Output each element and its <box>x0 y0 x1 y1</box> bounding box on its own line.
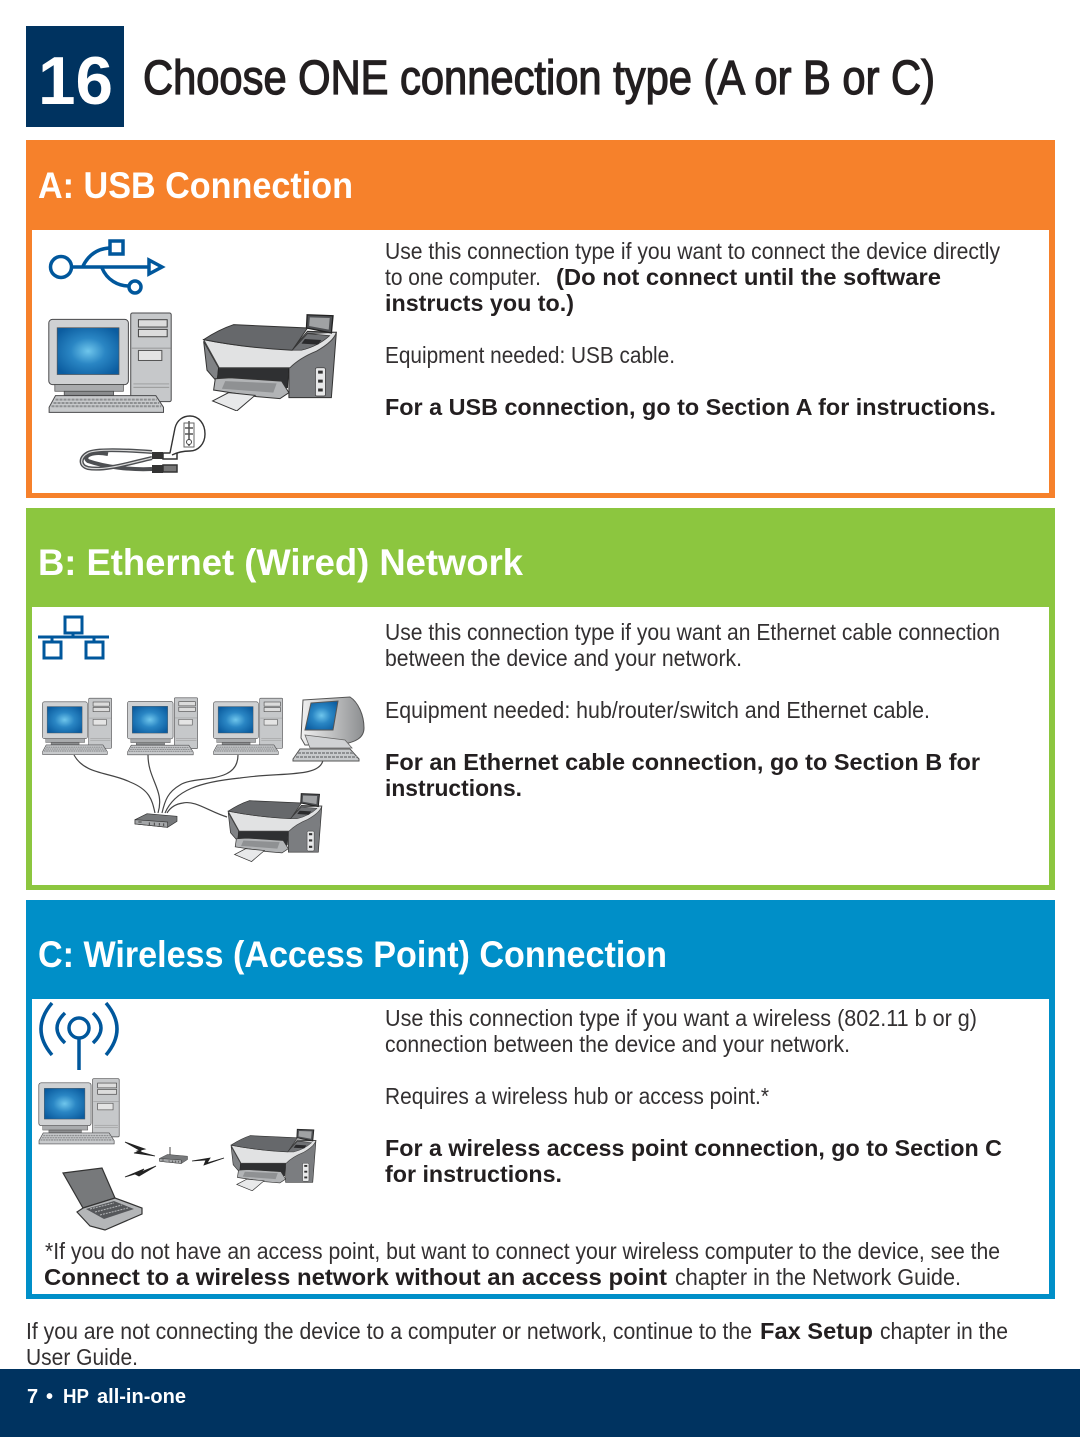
text: wireless description: For a wireless access point connection, go to Section C <box>385 1135 1002 1161</box>
text: access point footnote: *If you do not have an access point, but want to connect your wireless computer to the device, see the <box>45 1238 1000 1264</box>
illustration: printer <box>231 1129 316 1191</box>
text: closing note: User Guide. <box>26 1344 138 1370</box>
illustration: computer <box>39 1079 119 1144</box>
illustration: printer <box>204 315 336 411</box>
heading: A: A: USB Connection <box>38 165 353 206</box>
text: USB description <box>385 238 1000 420</box>
icon: wireless antenna <box>41 1003 117 1070</box>
illustration: cables <box>74 755 323 817</box>
icon: USB symbol <box>50 241 162 293</box>
text: closing note: If you are not connecting the device to a computer or network, continue to the <box>26 1318 752 1344</box>
text: Ethernet description <box>385 619 1000 801</box>
panel: C wireless connection <box>26 900 1055 1299</box>
illustration: computer 2 <box>127 698 198 755</box>
footer bar: all-in-one <box>97 1386 186 1408</box>
heading: C: C: Wireless (Access Point) Connection <box>38 934 667 975</box>
footer bar: • <box>46 1386 53 1408</box>
illustration: computer 1 <box>42 698 112 754</box>
text: wireless description: Requires a wireless hub or access point.* <box>385 1083 769 1109</box>
icon: network symbol <box>38 617 109 658</box>
illustration: desktop computer <box>49 313 171 412</box>
illustration: iMac <box>293 697 364 761</box>
text: USB description: to one computer. <box>385 264 541 290</box>
text: Ethernet description: Equipment needed: hub/router/switch and Ethernet cable. <box>385 697 930 723</box>
text: USB description: Equipment needed: USB cable. <box>385 342 675 368</box>
text: USB description: (Do not connect until the software <box>556 264 941 290</box>
text: wireless description <box>385 1005 1002 1187</box>
text: USB description: instructs you to.) <box>385 290 574 316</box>
footer bar: HP <box>63 1386 89 1408</box>
title: Choose ONE connection type (A or B or C) <box>143 52 935 105</box>
footer bar: 7 <box>27 1386 38 1408</box>
footer bar <box>0 1369 1080 1437</box>
text: closing note: Fax Setup <box>760 1318 873 1344</box>
panel: A USB connection <box>26 140 1055 498</box>
text: closing note: chapter in the <box>880 1318 1008 1344</box>
text: Ethernet description: For an Ethernet cable connection, go to Section B for <box>385 749 980 775</box>
text: USB description: Use this connection type if you want to connect the device directly <box>385 238 1000 264</box>
text: closing note <box>26 1318 1008 1370</box>
step number badge <box>26 26 124 127</box>
text: access point footnote <box>44 1238 1000 1290</box>
text: Ethernet description: instructions. <box>385 775 522 801</box>
illustration: wireless signal bolts <box>125 1142 224 1177</box>
text: wireless description: for instructions. <box>385 1161 562 1187</box>
illustration: printer <box>228 794 322 862</box>
illustration: access point <box>160 1147 188 1164</box>
text: USB description: For a USB connection, go to Section A for instructions. <box>385 394 996 420</box>
text: wireless description: Use this connection type if you want a wireless (802.11 b or g) <box>385 1005 977 1031</box>
illustration: computer 3 <box>213 698 283 754</box>
illustration: laptop <box>63 1168 142 1230</box>
heading: B: B: Ethernet (Wired) Network <box>38 542 523 583</box>
illustration: network switch <box>135 814 177 827</box>
panel: B Ethernet network <box>26 508 1055 890</box>
text: access point footnote: Connect to a wireless network without an access point <box>44 1264 667 1290</box>
text: Ethernet description: between the device and your network. <box>385 645 742 671</box>
illustration: USB cable <box>82 416 205 473</box>
text: access point footnote: chapter in the Network Guide. <box>675 1264 961 1290</box>
step number badge: 16 <box>38 43 113 119</box>
text: Ethernet description: Use this connection type if you want an Ethernet cable connection <box>385 619 1000 645</box>
text: wireless description: connection between the device and your network. <box>385 1031 850 1057</box>
